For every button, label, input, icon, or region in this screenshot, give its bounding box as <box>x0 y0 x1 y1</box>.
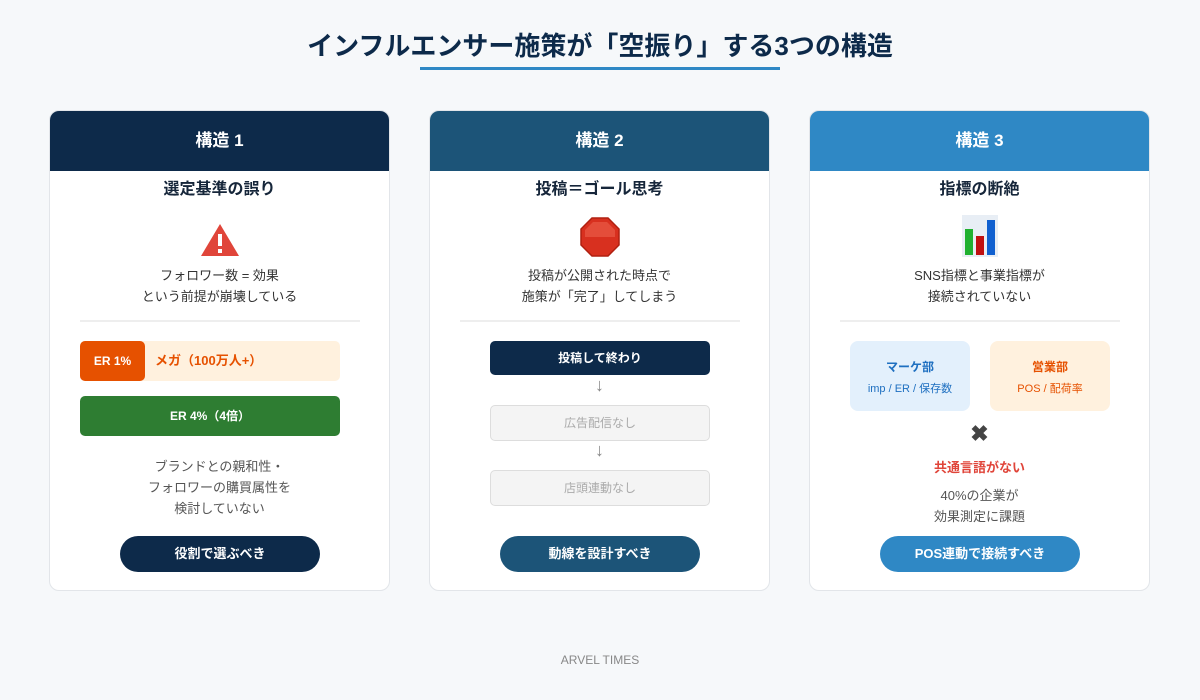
text 1b: ブランドとの親和性・ <box>155 459 284 474</box>
subtitle 3: 指標の断絶 <box>939 181 1020 198</box>
panel: structure 1 <box>49 110 390 591</box>
icon: cross: ✖ <box>970 421 989 446</box>
text 2 <box>522 268 677 304</box>
bar: micro: ER 4%（4倍） <box>170 409 250 423</box>
panel: structure 3 <box>809 110 1150 591</box>
flow box: no store: 店頭連動なし <box>564 481 636 495</box>
text 2: 投稿が公開された時点で <box>528 268 671 283</box>
bar: mega <box>80 341 340 381</box>
bar: mega: メガ（100万人+） <box>155 353 262 368</box>
header 1 <box>50 111 389 171</box>
text 1 <box>142 268 297 304</box>
flow box: posted <box>490 341 710 375</box>
text 3: SNS指標と事業指標が <box>914 268 1045 283</box>
text 3b: 40%の企業が <box>940 488 1019 503</box>
box: marketing <box>850 341 970 411</box>
button 1: 役割で選ぶべき <box>174 546 266 561</box>
header 1: 構造 1 <box>195 131 244 150</box>
arrow: ↓ <box>595 440 604 460</box>
text 3b: 効果測定に課題 <box>934 509 1025 524</box>
box: sales: 営業部 <box>1032 360 1068 374</box>
text 1b: フォロワーの購買属性を <box>148 480 291 495</box>
box: marketing: imp / ER / 保存数 <box>868 383 952 395</box>
flow box: no ads <box>490 405 710 441</box>
icon: stop sign <box>580 217 620 257</box>
text 1b: 検討していない <box>174 501 265 516</box>
flow box: posted: 投稿して終わり <box>558 351 642 365</box>
panel: structure 2 <box>429 110 770 591</box>
arrow: ↓ <box>595 375 604 395</box>
red text: 共通言語がない <box>934 460 1025 475</box>
header 2: 構造 2 <box>575 131 624 150</box>
text 1b <box>148 459 291 516</box>
button 1 <box>120 536 320 572</box>
footer: ARVEL TIMES <box>561 653 639 667</box>
bar: micro <box>80 396 340 436</box>
box: sales: POS / 配荷率 <box>1017 383 1083 395</box>
button 2: 動線を設計すべき <box>548 546 652 561</box>
button 3: POS連動で接続すべき <box>915 546 1045 561</box>
subtitle 2: 投稿＝ゴール思考 <box>535 181 664 198</box>
text 1: という前提が崩壊している <box>142 289 297 304</box>
flow box: no store <box>490 470 710 506</box>
title: インフルエンサー施策が「空振り」する3つの構造 <box>307 31 893 61</box>
icon: bar chart <box>962 215 998 257</box>
header 3 <box>810 111 1149 171</box>
text 2: 施策が「完了」してしまう <box>522 289 677 304</box>
button 2 <box>500 536 700 572</box>
box: marketing: マーケ部 <box>886 360 934 374</box>
header 3: 構造 3 <box>955 131 1004 150</box>
flow box: no ads: 広告配信なし <box>564 416 636 430</box>
box: sales <box>990 341 1110 411</box>
subtitle 1: 選定基準の誤り <box>163 181 276 198</box>
text 3 <box>914 268 1045 304</box>
text 1: フォロワー数 = 効果 <box>160 268 279 283</box>
bar: mega: ER 1% <box>94 354 131 368</box>
title underline <box>420 67 780 70</box>
icon: warning <box>201 224 239 256</box>
text 3: 接続されていない <box>928 289 1031 304</box>
text 3b <box>934 488 1025 524</box>
header 2 <box>430 111 769 171</box>
button 3 <box>880 536 1080 572</box>
